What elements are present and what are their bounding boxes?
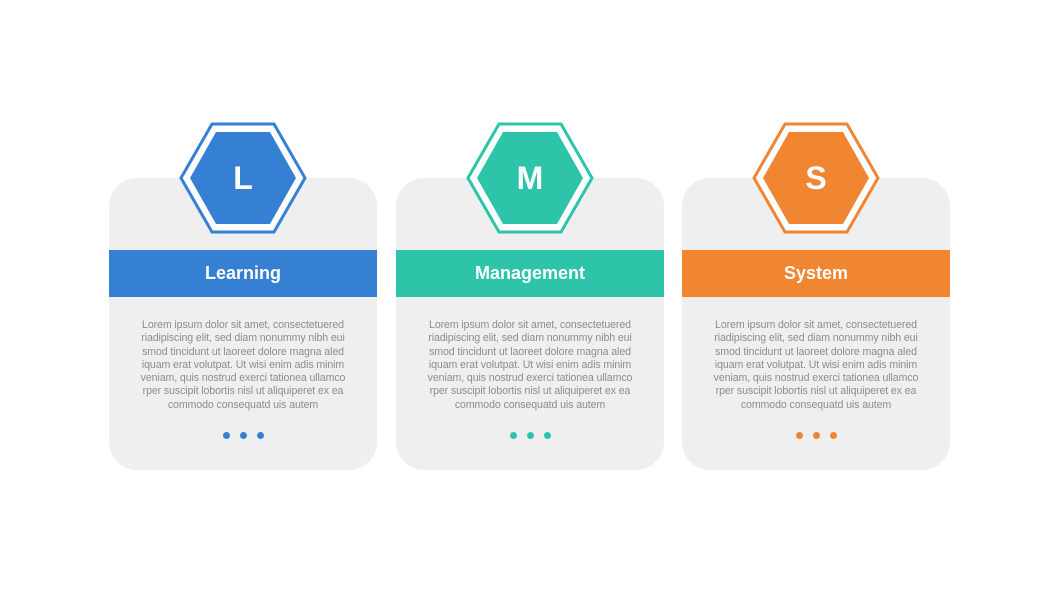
- text block: riadipiscing elit, sed diam nonummy nibh eui: [714, 332, 918, 344]
- text block: commodo consequatd uis autem: [741, 399, 891, 411]
- band: Learning: [109, 250, 377, 297]
- text block: Lorem ipsum dolor sit amet, consectetuered: [429, 319, 631, 331]
- text block: rper suscipit lobortis nisl ut aliquiperet ex ea: [430, 385, 630, 397]
- text block: Lorem ipsum dolor sit amet, consectetuered: [715, 319, 917, 331]
- text block: rper suscipit lobortis nisl ut aliquiperet ex ea: [143, 385, 343, 397]
- icon: hexagon S: S: [805, 160, 827, 196]
- icon: hexagon L: L: [233, 160, 253, 196]
- text block: [428, 319, 632, 411]
- icon: hexagon M: [466, 122, 594, 234]
- band: System: System: [784, 263, 848, 283]
- text block: smod tincidunt ut laoreet dolore magna aled: [429, 346, 631, 358]
- text block: iquam erat volutpat. Ut wisi enim adis minim: [142, 359, 344, 371]
- text block: [140, 319, 345, 411]
- dots: [796, 432, 837, 439]
- band: System: [682, 250, 950, 297]
- text block: iquam erat volutpat. Ut wisi enim adis minim: [429, 359, 631, 371]
- text block: commodo consequatd uis autem: [168, 399, 318, 411]
- band: Learning: Learning: [205, 263, 281, 283]
- band: Management: Management: [475, 263, 585, 283]
- text block: iquam erat volutpat. Ut wisi enim adis minim: [715, 359, 917, 371]
- dots: [223, 432, 264, 439]
- icon: hexagon L: [179, 122, 307, 234]
- icon: hexagon S: [752, 122, 880, 234]
- text block: riadipiscing elit, sed diam nonummy nibh eui: [428, 332, 632, 344]
- text block: smod tincidunt ut laoreet dolore magna aled: [715, 346, 917, 358]
- text block: rper suscipit lobortis nisl ut aliquiperet ex ea: [716, 385, 916, 397]
- text block: veniam, quis nostrud exerci tationea ullamco: [714, 372, 918, 384]
- text block: [714, 319, 918, 411]
- text block: commodo consequatd uis autem: [455, 399, 605, 411]
- icon: hexagon M: M: [517, 160, 543, 196]
- panel: Management: [396, 178, 664, 470]
- panel: Learning: [109, 178, 377, 470]
- text block: Lorem ipsum dolor sit amet, consectetuered: [142, 319, 344, 331]
- text block: riadipiscing elit, sed diam nonummy nibh eui: [141, 332, 345, 344]
- text block: veniam, quis nostrud exerci tationea ullamco: [141, 372, 345, 384]
- band: Management: [396, 250, 664, 297]
- panel: System: [682, 178, 950, 470]
- dots: [510, 432, 551, 439]
- text block: smod tincidunt ut laoreet dolore magna aled: [142, 346, 344, 358]
- text block: veniam, quis nostrud exerci tationea ullamco: [428, 372, 632, 384]
